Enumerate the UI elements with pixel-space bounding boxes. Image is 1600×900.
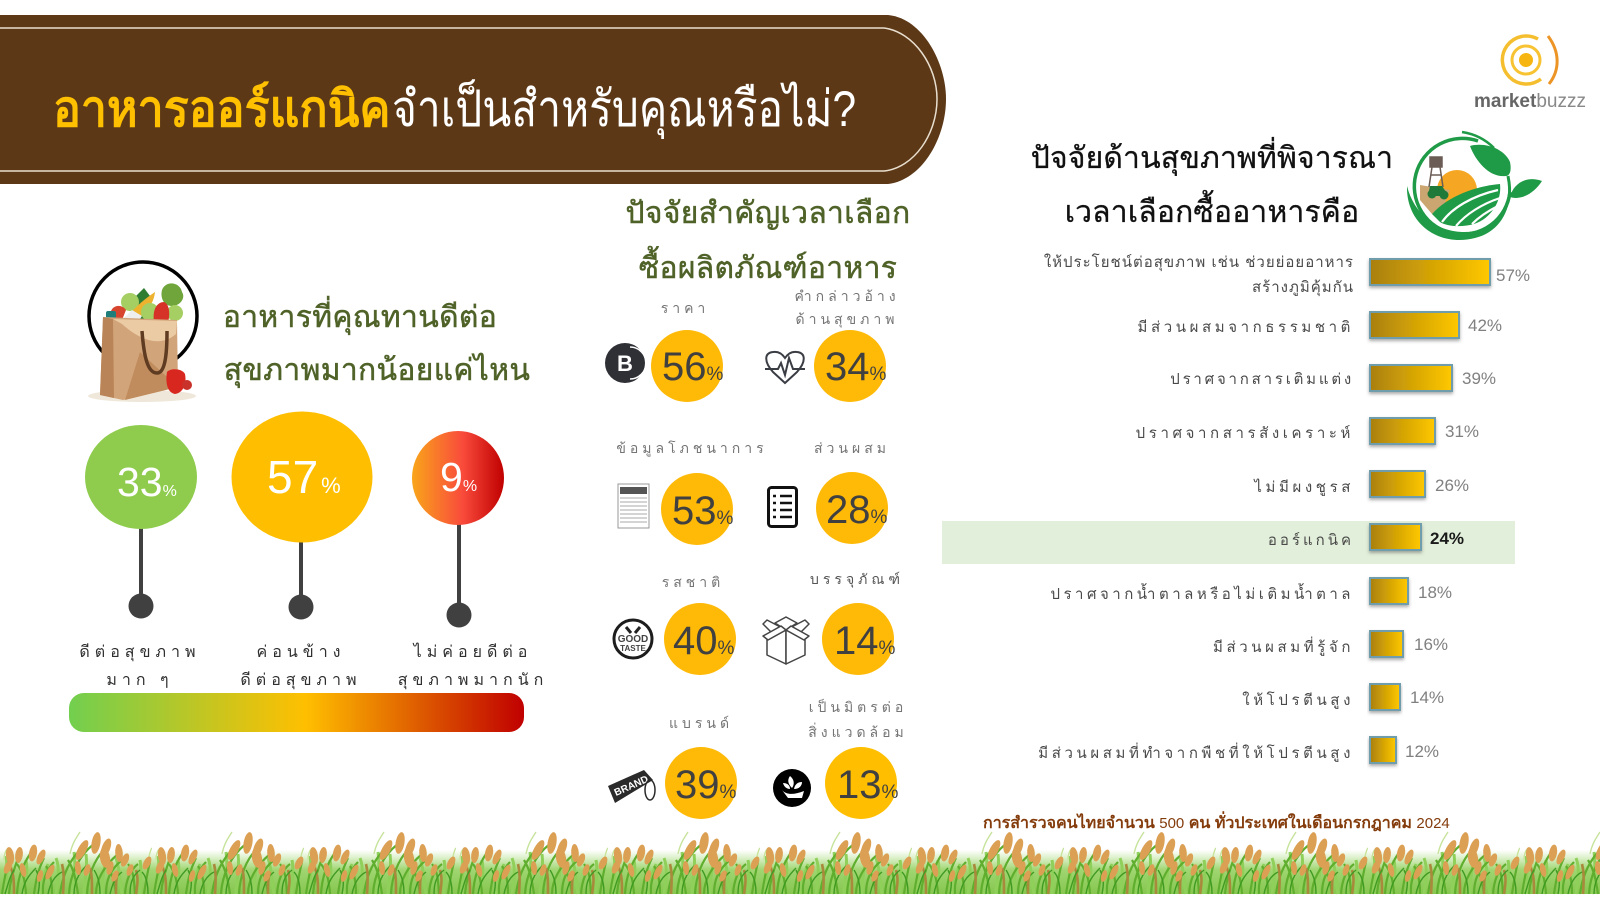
factor: eco friendly 13%: 13% (837, 763, 898, 807)
row: no sugar 18% (1050, 578, 1452, 604)
factor: packaging 14%: 14% (834, 619, 896, 663)
row: no additives 39%: ปราศจากสารเติมแต่ง (1170, 371, 1354, 388)
icon: open box (763, 617, 809, 664)
factor: taste 40%: 40% (673, 619, 734, 663)
factor: eco friendly 13% (773, 698, 908, 819)
icon: good taste badge: TASTE (620, 644, 646, 653)
icon: plant in hand (773, 769, 811, 807)
title (53, 79, 856, 140)
factor: ingredients 28% (768, 440, 890, 544)
row: no additives 39%: 39% (1462, 369, 1496, 388)
item: fairly good 57% (232, 412, 372, 690)
row: high protein 14%: ให้โปรตีนสูง (1242, 691, 1354, 709)
row: natural ingredients 42%: 42% (1468, 316, 1502, 335)
factor: brand 39%: แบรนด์ (669, 715, 733, 731)
row: health benefit 57%: สร้างภูมิคุ้มกัน (1252, 279, 1354, 297)
heading: food health (223, 296, 530, 389)
heading: health factors (1031, 137, 1393, 229)
highlight band: organic row (942, 521, 1515, 564)
row: known ingredients 16% (1213, 631, 1448, 657)
item: very good 33% (79, 425, 201, 689)
logo: marketbuzzz (1474, 36, 1586, 112)
icon: nutrition facts (618, 484, 649, 528)
factor: packaging 14% (763, 571, 904, 675)
item: not good 9%: ไม่ค่อยดีต่อ (412, 642, 532, 661)
icon: list document (768, 488, 796, 526)
row: natural ingredients 42% (1137, 312, 1502, 338)
row: plant protein 12%: 12% (1405, 742, 1439, 761)
panel: key purchase factors (605, 197, 910, 819)
icon: coin: B (617, 351, 633, 376)
heading: food health: สุขภาพมากน้อยแค่ไหน (224, 352, 530, 389)
factor: eco friendly 13%: สิ่งแวดล้อม (808, 723, 908, 740)
factor: health claims 34%: ด้านสุขภาพ (796, 311, 898, 328)
factor: taste 40% (614, 574, 736, 675)
factor: health claims 34%: คำกล่าวอ้าง (794, 288, 900, 304)
heading: key factors (626, 197, 910, 285)
factor: brand 39% (608, 715, 737, 819)
item: fairly good 57%: ดีต่อสุขภาพ (240, 671, 362, 690)
icon: good taste badge: GOOD (618, 634, 648, 645)
factor: eco friendly 13%: เป็นมิตรต่อ (809, 698, 907, 715)
row: no msg 26%: 26% (1435, 476, 1469, 495)
row: health benefit 57%: 57% (1496, 266, 1530, 285)
item: fairly good 57%: ค่อนข้าง (257, 643, 345, 661)
factor: price 56%: ราคา (661, 300, 709, 316)
heading: key factors: ปัจจัยสำคัญเวลาเลือก (626, 197, 910, 230)
row: no synthetics 31%: 31% (1445, 422, 1479, 441)
row: no additives 39% (1170, 365, 1496, 391)
row: known ingredients 16%: มีส่วนผสมที่รู้จัก (1213, 636, 1354, 656)
factor: health claims 34%: 34% (825, 345, 886, 389)
factor: brand 39%: 39% (675, 763, 736, 807)
icon: farm emblem (1407, 132, 1542, 240)
row: plant protein 12%: มีส่วนผสมที่ทำจากพืชที่ให้โปรตีนสูง (1038, 742, 1354, 762)
row: no msg 26% (1253, 471, 1469, 497)
heading: health factors: เวลาเลือกซื้ออาหารคือ (1065, 190, 1359, 229)
factor: nutrition info 53% (616, 440, 768, 545)
title banner (0, 15, 946, 184)
heading: food health: อาหารที่คุณทานดีต่อ (223, 296, 497, 336)
panel: health perception (69, 262, 548, 732)
factor: nutrition info 53%: ข้อมูลโภชนาการ (616, 440, 768, 457)
row: high protein 14%: 14% (1410, 688, 1444, 707)
grass and wheat strip (0, 830, 1600, 895)
item: very good 33%: มาก ๆ (106, 672, 174, 689)
row: no synthetics 31%: ปราศจากสารสังเคราะห์ (1136, 425, 1354, 442)
title: อาหารออร์แกนิค (53, 81, 391, 137)
factor: ingredients 28%: ส่วนผสม (814, 440, 890, 456)
panel: health factors (942, 132, 1542, 832)
row: plant protein 12% (1038, 737, 1439, 763)
row: no synthetics 31% (1136, 418, 1479, 444)
row: health benefit 57% (1044, 253, 1530, 297)
factor: ingredients 28%: 28% (826, 488, 888, 532)
row: health benefit 57%: ให้ประโยชน์ต่อสุขภาพ เช่น ช่วยย่อยอาหาร (1044, 253, 1354, 272)
item: not good 9%: สุขภาพมากนัก (398, 672, 548, 690)
heading: health factors: ปัจจัยด้านสุขภาพที่พิจารณา (1031, 137, 1393, 177)
item: fairly good 57%: 57% (267, 451, 341, 503)
icon: heart pulse (765, 352, 805, 383)
factor: health claims 34% (765, 288, 900, 402)
factor: price 56%: 56% (662, 345, 724, 389)
row: organic 24% (1268, 524, 1464, 550)
footnote: การสำรวจคนไทยจำนวน 500 คน ทั่วประเทศในเดือนกรกฎาคม 2024 (983, 811, 1450, 832)
factor: price 56% (605, 300, 724, 402)
item: very good 33%: 33% (117, 459, 177, 505)
row: no msg 26%: ไม่มีผงชูรส (1253, 478, 1354, 496)
row: known ingredients 16%: 16% (1414, 635, 1448, 654)
heading: key factors: ซื้อผลิตภัณฑ์อาหาร (639, 246, 897, 285)
item: very good 33%: ดีต่อสุขภาพ (79, 643, 201, 662)
row: high protein 14% (1242, 684, 1444, 710)
factor: taste 40%: รสชาติ (662, 574, 724, 590)
item: not good 9%: 9% (440, 454, 477, 500)
factor: nutrition info 53%: 53% (672, 489, 734, 533)
bar chart: health factors (1038, 253, 1530, 763)
gradient scale bar (69, 693, 524, 732)
icon: good taste badge (614, 620, 652, 658)
row: organic 24%: ออร์แกนิค (1268, 532, 1354, 549)
logo: marketbuzzz: marketbuzzz (1474, 91, 1586, 112)
icon: brand tag: BRAND (613, 774, 650, 799)
row: organic 24%: 24% (1430, 529, 1464, 548)
title: จำเป็นสำหรับคุณหรือไม่? (392, 79, 856, 140)
item: not good 9% (398, 431, 548, 690)
factor: packaging 14%: บรรจุภัณฑ์ (810, 571, 904, 588)
row: no sugar 18%: ปราศจากน้ำตาลหรือไม่เติมน้ำตาล (1050, 583, 1354, 603)
row: natural ingredients 42%: มีส่วนผสมจากธรรมชาติ (1137, 319, 1354, 336)
row: no sugar 18%: 18% (1418, 583, 1452, 602)
icon: grocery bag (88, 262, 197, 402)
